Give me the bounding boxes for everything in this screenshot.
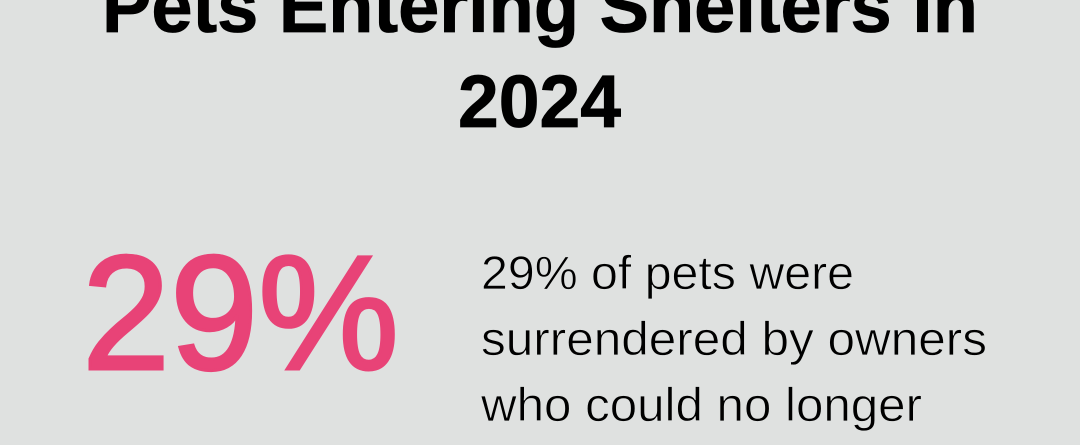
title [102, 0, 978, 143]
statistic description: surrendered by owners [481, 312, 987, 365]
title: 2024 [458, 60, 621, 143]
statistic description: 29% of pets were [481, 246, 854, 299]
statistic description: who could no longer [480, 378, 922, 431]
big statistic: 29%: 29% [82, 221, 399, 404]
statistic description [480, 246, 987, 431]
